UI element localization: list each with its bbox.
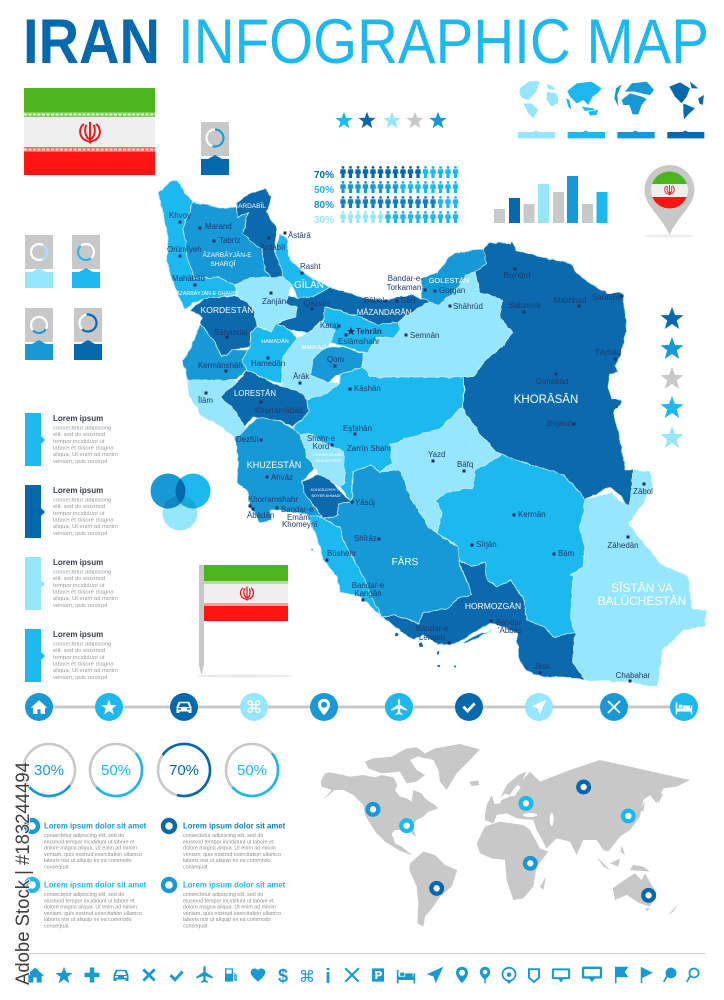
list item 1: Lorem ipsum dolor sit amet [44,822,147,830]
list item 3: dolore magna aliqua. Ut enim ad minim [44,905,138,911]
province: Ilam [188,380,247,438]
city and province labels: Kord [313,442,329,451]
title: IRAN [23,7,160,77]
badge dark [74,308,102,360]
gauge 30%: 30% [34,762,64,779]
icon: star [95,693,123,721]
africa [477,822,548,900]
province: Hormozgan [382,560,585,680]
gauge 50% [79,733,153,807]
city and province labels: Qom [327,355,345,364]
north america [321,772,438,855]
scandinavia [500,772,527,798]
list item 4: eiusmod tempor incididunt ut labore et [183,898,274,904]
list item 3: consectetur adipiscing elit, sed do [44,892,124,898]
city and province labels: Bīrjand [547,419,572,428]
city and province labels: Bandar-e [352,581,385,590]
city and province labels: Īlām [198,396,213,405]
city and province labels: Sārī [401,296,416,305]
text block 2: Lorem ipsum [53,486,103,495]
city and province labels: Zāhedān [607,541,639,550]
city and province labels [167,202,686,680]
city and province labels: Kāshān [354,384,381,393]
icon: command [240,693,268,721]
text block 4: labore et dolore magna [53,662,114,668]
text block 4: tempor incididunt ut [53,655,105,661]
city and province labels: KHORĀSĀN [514,394,578,406]
list item 1: laboris nisi ut aliquip ex ea commodo [44,858,132,864]
list item 2: consectetur adipiscing elit, sed do [183,833,263,839]
city and province labels: Shahr-e [307,434,336,443]
province: Khorasan [462,240,633,505]
list item 4: consequat [183,924,208,930]
people percentage chart: 70% [314,170,334,181]
city and province labels: Khomeynī [282,520,318,529]
icon: cutlery [600,693,628,721]
city and province labels: Bām [558,549,575,558]
icon: pin [310,693,338,721]
gauge 70% [148,734,220,806]
text block 2: veniam, quis nostrud [53,531,107,537]
city and province labels: Emām [287,513,310,522]
text block 1: veniam, quis nostrud [53,459,107,465]
list item 3: eiusmod tempor incididunt ut labore et [44,898,135,904]
list item 4: veniam, quis nostrud exercitation ullamco [183,911,281,917]
city and province labels: Sanandaj [214,328,248,337]
city and province labels: 'Abbās [498,626,522,635]
text block 3: aliqua. Ut enim ad minim [53,596,118,602]
city and province labels: LORESTĀN [234,389,276,398]
text block 3: elit, sed do eiusmod [53,576,105,582]
city and province labels: Mahābād [172,274,205,283]
people percentage chart: 30% [314,215,334,226]
city and province labels: Qazvīn [304,299,329,308]
greenland [418,744,480,790]
city and province labels: Eslāmshahr [338,337,380,346]
city and province labels: Sīrjān [476,540,497,549]
city and province labels: Karaj [320,321,339,330]
city and province labels: Kangān [354,589,382,598]
city and province labels: Bandar-e [388,274,421,283]
icon: home [25,693,53,721]
inland seas [510,785,554,826]
text block 4: consectetur adipiscing [53,642,111,648]
gauge 30% [13,734,85,806]
city and province labels: Tāybād [595,348,621,357]
city and province labels: Lengeh [419,633,445,642]
province: Hamadan [242,323,297,383]
list item 4: Lorem ipsum dolor sit amet [183,880,286,890]
gauge 70%: 70% [169,762,199,779]
text block 3: Lorem ipsum [53,558,103,567]
icon: bed [670,693,698,721]
islands [311,548,492,668]
city and province labels: Tehrān [356,327,382,336]
list item 2: veniam, quis nostrud exercitation ullamco [183,852,281,858]
list item 1: eiusmod tempor incididunt ut labore et [44,839,135,845]
list item 4: consectetur adipiscing elit, sed do [183,892,263,898]
city and province labels: BOYER AHMADĪ [312,494,341,498]
list item 3: Lorem ipsum dolor sit amet [44,880,147,890]
badge light [72,235,100,288]
bottom icon row: $ [278,966,288,986]
city and province labels: CHAHĀR MAHĀLL [312,453,344,457]
city and province labels: Bandar-e [416,624,449,633]
city markers [178,220,646,682]
city and province labels: Orūmīyeh [167,245,202,254]
text block 4: Lorem ipsum [53,630,103,639]
city and province labels: HAMADĀN [261,338,289,345]
city and province labels: Sarakhs [592,293,621,302]
city and province labels: SHARQĪ [211,260,236,268]
globe: americas pale [519,81,558,118]
bar chart [494,176,608,223]
city and province labels: ĀZARBĀYJĀN-E GHARBĪ [176,290,238,297]
arctic islands [365,747,425,783]
eurasia [485,760,690,855]
province: Fars [323,465,472,623]
text block 2: labore et dolore magna [53,518,114,524]
world map [321,744,690,927]
province: Kohgiluyeh va Boyer Ahmadi [302,474,352,518]
list item 2 [163,820,286,870]
province: Qom [310,347,363,382]
gauge 50%: 50% [101,762,131,779]
city and province labels: Kermānshāh [198,361,243,370]
province: Chaharmahal va Bakhtiari [300,433,345,487]
icon: command: ⌘ [246,698,262,718]
text block 4: aliqua. Ut enim ad minim [53,668,118,674]
city and province labels: Kermān [518,510,546,519]
city and province labels: Marand [205,222,232,231]
star rating row [335,112,447,128]
progress badges left [25,235,102,360]
city and province labels: Mashhad [554,296,586,305]
city and province labels: HORMOZGĀN [465,601,521,611]
list item 3: laboris nisi ut aliquip ex ea commodo [44,917,132,923]
city and province labels: Ardabīl [260,243,285,252]
side stars [660,307,684,448]
map pin with flag [644,165,694,238]
list item 4: dolore magna aliqua. Ut enim ad minim [183,905,277,911]
city and province labels: Khorramshahr [248,495,298,504]
list item 1: consectetur adipiscing elit, sed do [44,833,124,839]
venn diagram [150,474,210,530]
city and province labels: VA BAKHTĪĀRĪ [315,459,342,463]
text block 2: elit, sed do eiusmod [53,504,105,510]
list item 1: veniam, quis nostrud exercitation ullamco [44,852,142,858]
globe: africa mid blue [614,82,654,114]
city and province labels: Dezfūl [236,435,259,444]
city and province labels: FĀRS [392,556,419,568]
province: Lorestan [220,370,308,427]
city and province labels: Gorgan [439,286,465,295]
list item 3 [26,879,147,930]
text block 3: veniam, quis nostrud [53,603,107,609]
province: Azarbayjan-e Sharqi [183,202,272,285]
text block 1: labore et dolore magna [53,446,114,452]
city and province labels: GOLESTĀN [429,276,469,285]
Iran map [158,180,707,687]
text block 3: tempor incididunt ut [53,583,105,589]
globe bars [518,130,704,138]
city and province labels: MARKAZĪ [302,344,327,351]
people row 30% [340,211,458,223]
city and province labels: Bandar [496,618,522,627]
city and province labels: Khorramābād [255,406,303,415]
city and province labels: Eşfahān [343,424,372,433]
province: Yazd [380,408,502,547]
badge mid [25,308,53,360]
city and province labels: Bandar-e [281,505,314,514]
list item 2: dolore magna aliqua. Ut enim ad minim [183,846,277,852]
text block 3: labore et dolore magna [53,590,114,596]
list item 4: laboris nisi ut aliquip ex ea commodo [183,917,271,923]
province: Khuzestan [235,417,323,523]
city and province labels: KHUZESTĀN [247,460,301,470]
text block 2: aliqua. Ut enim ad minim [53,524,118,530]
australia and new zealand [613,873,678,915]
people percentage chart [314,166,458,226]
text block 1: consectetur adipiscing [53,426,111,432]
city and province labels: Semnān [410,331,439,340]
flag on pole [197,565,293,678]
icon timeline [25,693,698,721]
city and province labels: Zarrīn Shahr [347,444,392,453]
city and province labels: SĪSTĀN VA [611,581,673,595]
city and province labels: Shāhrūd [453,302,483,311]
gauge 50% second: 50% [237,762,267,779]
city and province labels: GĪLĀN [294,279,324,291]
city and province labels: Tabrīz [219,236,241,245]
south america [409,852,457,927]
city and province labels: Zābol [633,487,653,496]
list item 3: veniam, quis nostrud exercitation ullamco [44,911,142,917]
province: Kermanshah [182,323,248,380]
city and province labels: MĀZANDARĀN [357,308,411,317]
people percentage chart: 80% [314,200,334,211]
stock id text: Adobe Stock | #183244494 [12,762,34,985]
list item 2: consequat [183,864,208,870]
icon: plane [385,693,413,721]
city and province labels: Torkaman [387,283,421,292]
province: Sistan va Baluchestan [570,470,707,687]
text block 1: tempor incididunt ut [53,439,105,445]
text block 1 [25,413,118,466]
text block 3: consectetur adipiscing [53,570,111,576]
province: Azarbayjan-e Gharbi [158,180,236,310]
text block 1: Lorem ipsum [53,414,103,423]
city and province labels: Chabahar [616,671,651,680]
people row 80% [340,196,458,208]
province: Kordestan [190,296,258,357]
flag of Iran [24,88,155,175]
province: Mazandaran and Qazvin [277,287,430,333]
city and province labels: KORDESTĀN [201,305,253,315]
city and province labels: Bābol [364,296,384,305]
bottom icon row: i [325,966,331,988]
text block 1: elit, sed do eiusmod [53,432,105,438]
city and province labels: Sabzevār [508,301,542,310]
list item 1 [26,820,147,870]
city and province labels: Yāsūj [355,498,375,507]
city and province labels: Khvoy [169,211,191,220]
province: Kerman [436,455,585,637]
bottom icon row: ⌘ [299,967,315,986]
badge pale [25,235,53,288]
city and province labels: KOHGĪLŪYEH VA [311,488,342,492]
city and province labels: Jāsk [534,662,550,671]
city and province labels: Shīrāz [354,534,377,543]
province: Markazi [282,322,340,400]
globe: asia light blue [566,82,602,116]
province: Semnan [363,272,512,377]
progress badge: dark blue top [201,122,229,175]
city and province labels: Bojnūrd [503,271,531,280]
city and province labels: Āstārā [288,231,311,240]
text block 1: aliqua. Ut enim ad minim [53,452,118,458]
text block 4: elit, sed do eiusmod [53,648,105,654]
list item 4 [163,879,286,930]
madagascar [540,877,546,890]
icon: check [455,693,483,721]
list item 2: eiusmod tempor incididunt ut labore et [183,839,274,845]
list item 3: consequat [44,924,69,930]
text block 4 [25,629,118,682]
city and province labels: Ahvāz [271,473,293,482]
city and province labels: Zanjān [262,297,286,306]
globe: americas dark [669,82,704,119]
list item 1: consequat [44,864,69,870]
province: Gilan [275,233,330,298]
province: Ardabil [237,188,283,278]
province: Esfahan [293,367,464,502]
text block 2: consectetur adipiscing [53,498,111,504]
province: Tehran [323,307,400,353]
bottom icon row [26,953,705,988]
world pins [368,782,654,901]
globes row [518,81,704,138]
city and province labels: Yazd [428,450,445,459]
list item 2: Lorem ipsum dolor sit amet [183,822,286,830]
province: Bushehr [308,515,382,617]
people percentage chart: 50% [314,185,334,196]
text block 2 [25,485,118,538]
gauge 50% second [215,733,289,807]
province: Zanjan [236,277,297,332]
city and province labels: ĀZARBĀYJĀN-E [202,251,252,259]
city and province labels: Rasht [300,262,321,271]
city and province labels: Gonābād [536,377,568,386]
text block 2: tempor incididunt ut [53,511,105,517]
icon: car [170,693,198,721]
islands of britain, iceland and asia [469,781,663,872]
list item 2: laboris nisi ut aliquip ex ea commodo [183,858,271,864]
people row 50% [340,181,458,193]
list item 1: dolore magna aliqua. Ut enim ad minim [44,846,138,852]
icon: send [525,693,553,721]
city and province labels: Būshehr [327,549,357,558]
people row 70% [340,166,458,178]
city and province labels: ARDABĪL [238,202,266,210]
city and province labels: BALŪCHESTĀN [598,594,686,608]
text block 4: veniam, quis nostrud [53,675,107,681]
text block 3 [25,557,118,610]
city and province labels: Ārāk [293,372,309,381]
province: Golestan [421,248,486,305]
city and province labels: Ābādān [247,511,274,520]
city and province labels: Hamedān [251,359,285,368]
city and province labels: Bāfq [457,460,473,469]
